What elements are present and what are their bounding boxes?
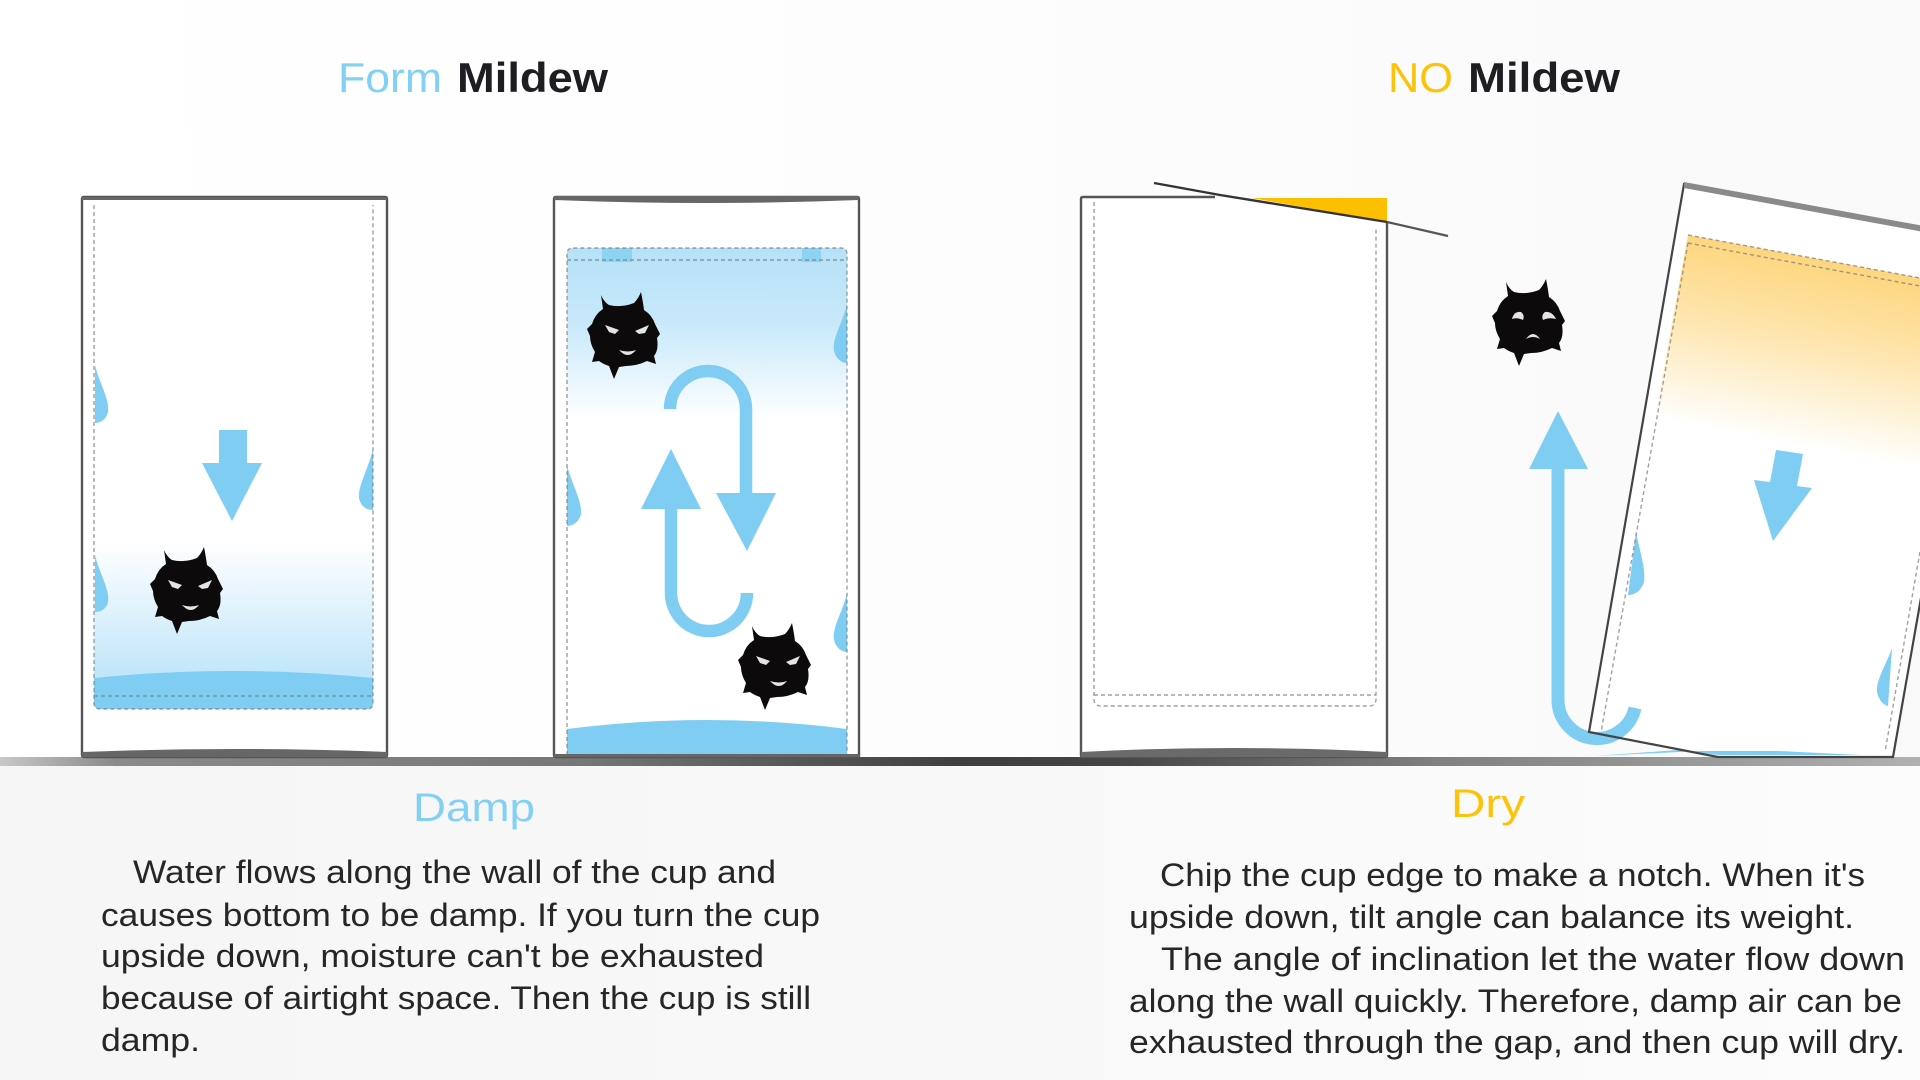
title: Form Mildew: Mildew: [457, 54, 608, 101]
water pool: [567, 720, 847, 755]
text block: dry explanation: exhausted through the gap, and then cup will dry.: [1129, 1024, 1905, 1060]
top patches: [602, 248, 821, 262]
droplets: [95, 365, 373, 612]
heading: Dry: Dry: [1451, 782, 1525, 826]
text block: damp explanation: Water flows along the wall of the cup and: [133, 854, 776, 890]
background upper: [0, 0, 1920, 760]
text block: damp explanation: because of airtight space. Then the cup is still: [101, 980, 811, 1016]
title: NO Mildew: [1388, 54, 1620, 101]
droplets: [567, 304, 847, 652]
cup rim: [554, 196, 859, 757]
text block: dry explanation: The angle of inclination let the water flow down: [1161, 941, 1905, 977]
cup rim: [82, 197, 387, 757]
ground line: [0, 757, 1920, 766]
inner dashed wall: [94, 205, 373, 709]
down arrow: [202, 430, 262, 521]
text block: damp explanation: causes bottom to be damp. If you turn the cup: [101, 897, 820, 933]
text block: damp explanation: damp.: [101, 1022, 200, 1058]
heading: Damp: Damp: [413, 786, 535, 830]
background lower: [0, 760, 1920, 1080]
title: Form Mildew: [338, 54, 608, 101]
mildew: sad, leaving: [1492, 279, 1565, 366]
cup outline: [1081, 197, 1387, 757]
circulation arrow: down: [670, 371, 776, 551]
damp gradient: [567, 248, 847, 420]
notch: yellow chip: [1252, 198, 1387, 222]
title: NO Mildew: NO: [1388, 54, 1453, 101]
droplets: [1628, 532, 1892, 706]
text block: dry explanation: [1129, 857, 1905, 1060]
mildew: angry: [150, 547, 223, 634]
title: NO Mildew: Mildew: [1468, 54, 1620, 101]
cup rim: [1684, 182, 1920, 243]
cup 1: damp at the bottom: [82, 197, 387, 757]
inner dashed wall: [1600, 235, 1920, 752]
mildew: angry bottom: [738, 623, 811, 710]
damp gradient: [94, 543, 373, 709]
water puddle: [1595, 750, 1860, 756]
cup 3: notched cup: [1081, 183, 1448, 757]
cup outline: [554, 197, 859, 757]
water pool: [94, 671, 373, 709]
exhaust arrow: [1529, 411, 1635, 739]
title: Form Mildew: Form: [338, 54, 442, 101]
text block: damp explanation: [101, 854, 820, 1058]
cup outline: [1589, 184, 1920, 757]
text block: dry explanation: Chip the cup edge to make a notch. When it's: [1160, 857, 1865, 893]
text block: dry explanation: upside down, tilt angle can balance its weight.: [1129, 899, 1854, 935]
inner dashed wall: [567, 248, 847, 755]
text block: dry explanation: along the wall quickly. Therefore, damp air can be: [1129, 983, 1902, 1019]
cup outline: [82, 197, 387, 757]
text block: damp explanation: upside down, moisture can't be exhausted: [101, 938, 764, 974]
cup 4: tilted cup: [1529, 182, 1920, 757]
mildew: angry top: [587, 292, 660, 379]
dry gradient: [1640, 235, 1920, 530]
cup 2: upside down, moisture trapped: [554, 196, 859, 757]
circulation arrow: up: [641, 449, 747, 631]
cup base: [1081, 748, 1387, 757]
inner dashed wall: [1094, 202, 1376, 706]
notch line: [1154, 183, 1387, 222]
tilted down arrow: [1754, 450, 1812, 541]
